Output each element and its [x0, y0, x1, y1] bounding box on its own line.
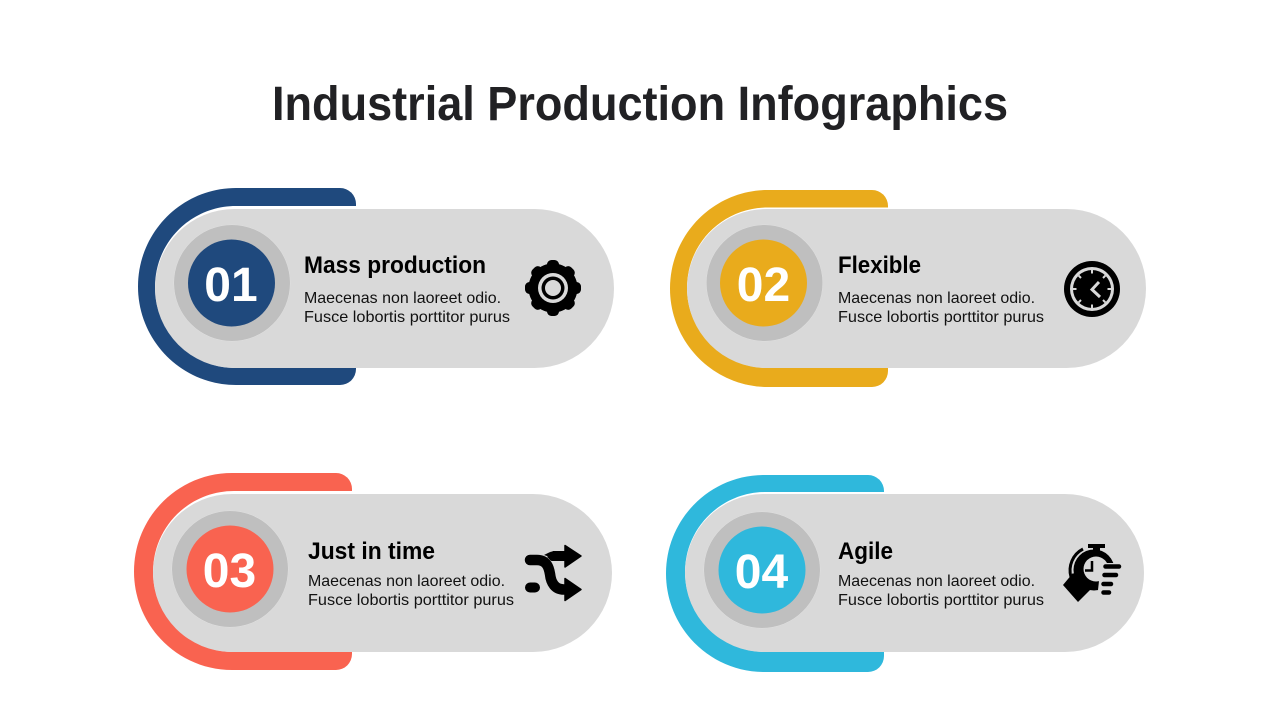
icon: stopwatch [1063, 544, 1119, 602]
accent bracket: blue [138, 188, 356, 385]
description: Fusce lobortis porttitor purus [838, 592, 1044, 609]
panel: 03 just in time [134, 473, 612, 670]
heading: Just in time [308, 538, 435, 565]
heading: Agile [838, 538, 893, 565]
number badge 02: 02 [737, 259, 790, 312]
number badge 04: 04 [735, 546, 788, 599]
description: Fusce lobortis porttitor purus [308, 592, 514, 609]
inner cut-out and gray pill [685, 492, 1144, 652]
icon: shuffle arrows [530, 546, 581, 600]
inner cut-out and gray pill [155, 206, 614, 368]
number badge 01: 01 [204, 259, 258, 312]
number badge 04 [704, 512, 820, 628]
accent bracket: cyan [666, 475, 884, 672]
number badge 01 [174, 225, 290, 341]
number badge 02 [706, 225, 823, 341]
accent bracket: gold [670, 190, 888, 387]
icon: clock [1064, 261, 1120, 317]
icon: gear [525, 260, 581, 316]
description: Fusce lobortis porttitor purus [304, 309, 510, 326]
description [308, 573, 514, 609]
number badge 03 [172, 511, 288, 627]
heading: Flexible [838, 252, 921, 279]
inner cut-out and gray pill [687, 208, 1146, 368]
panel: 02 flexible [670, 190, 1146, 387]
panel: 01 mass production [138, 188, 614, 385]
title: Industrial Production Infographics [272, 78, 1008, 131]
heading: Mass production [304, 252, 486, 279]
description [838, 290, 1044, 326]
description: Maecenas non laoreet odio. [304, 290, 501, 307]
description [304, 290, 510, 326]
inner cut-out and gray pill [153, 491, 612, 652]
panel: 04 agile [666, 475, 1144, 672]
number badge 03: 03 [203, 545, 256, 598]
description: Fusce lobortis porttitor purus [838, 309, 1044, 326]
description: Maecenas non laoreet odio. [838, 573, 1035, 590]
description: Maecenas non laoreet odio. [838, 290, 1035, 307]
description [838, 573, 1044, 609]
description: Maecenas non laoreet odio. [308, 573, 505, 590]
accent bracket: coral [134, 473, 352, 670]
